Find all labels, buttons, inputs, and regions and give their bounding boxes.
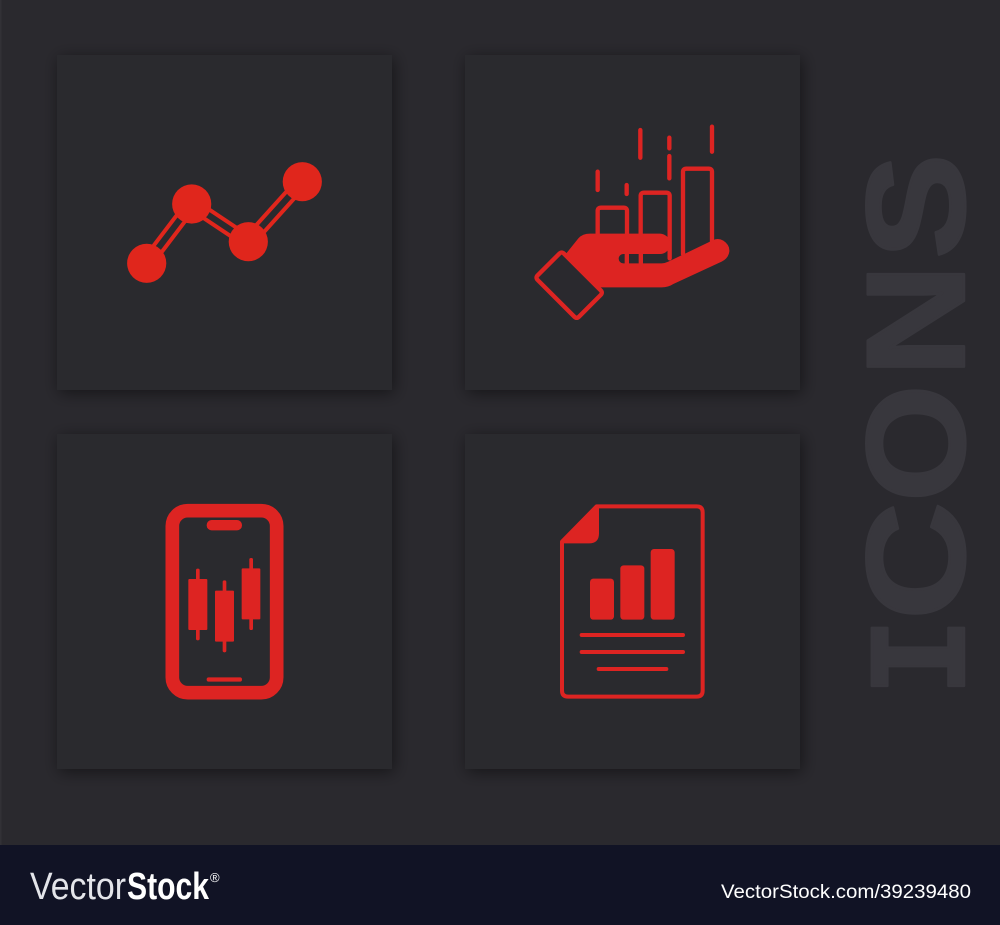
icon: document with bar chart (560, 505, 703, 697)
heading: vertical ICONS: N (838, 264, 994, 377)
icon: hand with bar chart (536, 127, 729, 318)
panel: mobile stock chart (57, 434, 392, 769)
heading: vertical ICONS (837, 153, 1000, 696)
logo: VectorStock: Stock (127, 866, 210, 908)
icon: phone with candlesticks (172, 511, 277, 693)
logo: VectorStock (30, 866, 220, 908)
heading: vertical ICONS: C (838, 502, 994, 620)
heading: vertical ICONS: S (837, 153, 994, 259)
logo: VectorStock: Vector (30, 866, 126, 908)
footer id text: VectorStock.com/39239480 (721, 881, 971, 903)
panel: document report (465, 434, 800, 769)
icon: line graph with nodes (127, 162, 322, 283)
logo: VectorStock: ® (210, 870, 220, 885)
panel: line graph (57, 55, 392, 390)
panel: hand holding chart (465, 55, 800, 390)
footer bar (0, 845, 1000, 925)
heading: vertical ICONS: O (837, 384, 994, 502)
